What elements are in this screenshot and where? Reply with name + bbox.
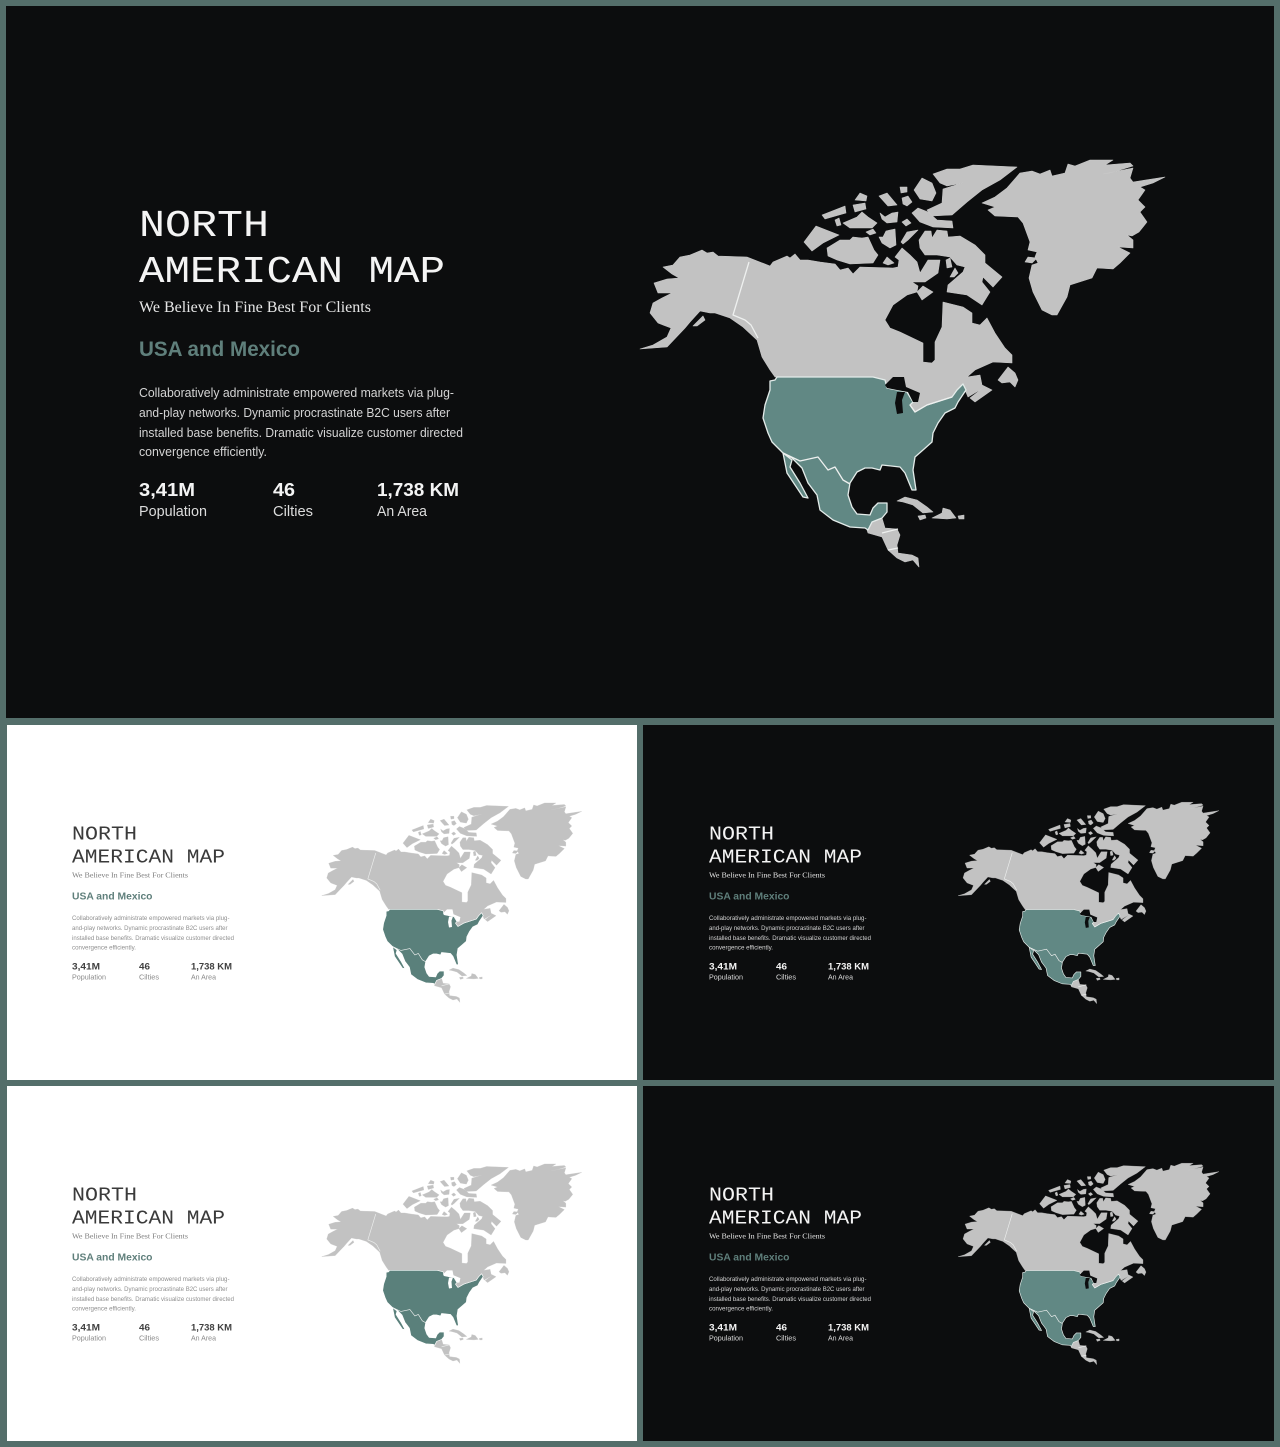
body text: installed base benefits. Dramatic visualize customer directed xyxy=(72,1296,234,1303)
heading: USA and Mexico: USA and Mexico xyxy=(72,890,152,902)
map: North America xyxy=(958,802,1219,1004)
body text: Collaboratively administrate empowered markets via plug- xyxy=(709,1276,866,1283)
panel: small light slide, top left xyxy=(7,725,637,1080)
stat: cities: Cilties xyxy=(139,1334,159,1342)
body text: and-play networks. Dynamic procrastinate B2C users after xyxy=(72,1286,228,1293)
body text: convergence efficiently. xyxy=(139,445,267,459)
body text: Collaboratively administrate empowered markets via plug- xyxy=(72,1276,230,1283)
stat: area: 1,738 KM xyxy=(828,962,869,972)
stat: population: 3,41M xyxy=(709,1322,737,1332)
heading: USA and Mexico: USA and Mexico xyxy=(72,1252,152,1264)
stat: area: An Area xyxy=(828,972,854,982)
slide content xyxy=(709,802,1219,1004)
stat: population: Population xyxy=(72,1334,106,1342)
stat: cities: 46 xyxy=(139,962,150,972)
main slide background xyxy=(6,6,1274,718)
subtitle: We Believe In Fine Best For Clients xyxy=(72,1232,188,1240)
stat: cities: Cilties xyxy=(273,503,313,520)
stat: area: An Area xyxy=(191,972,217,982)
title: NORTH xyxy=(709,1184,774,1206)
stat: area xyxy=(191,1322,232,1342)
title: NORTH xyxy=(72,824,137,846)
slide content xyxy=(709,1163,1219,1365)
body text: Collaboratively administrate empowered markets via plug- xyxy=(72,915,230,922)
title: AMERICAN MAP xyxy=(139,251,445,294)
stat: area: An Area xyxy=(377,503,428,520)
body text: convergence efficiently. xyxy=(72,1306,136,1312)
stat: area xyxy=(191,962,232,982)
heading: USA and Mexico: USA and Mexico xyxy=(709,890,790,902)
stat: area: 1,738 KM xyxy=(191,962,232,972)
body text: convergence efficiently. xyxy=(709,1306,773,1312)
stat: population: 3,41M xyxy=(72,962,100,972)
title: AMERICAN MAP xyxy=(72,1208,225,1230)
panel: small light slide, bottom left xyxy=(7,1086,637,1441)
stat: cities: Cilties xyxy=(776,1334,796,1342)
stat: area xyxy=(828,962,869,982)
stat: cities xyxy=(273,479,313,520)
body text: convergence efficiently. xyxy=(72,944,136,952)
body text: installed base benefits. Dramatic visualize customer directed xyxy=(72,935,234,942)
body text: and-play networks. Dynamic procrastinate B2C users after xyxy=(709,1286,864,1293)
stat: population: Population xyxy=(139,503,207,520)
stat: population xyxy=(139,479,207,520)
stat: population: Population xyxy=(72,972,106,982)
stat: area: 1,738 KM xyxy=(377,479,459,500)
title: NORTH xyxy=(709,824,774,846)
stat: population xyxy=(72,962,106,982)
subtitle: We Believe In Fine Best For Clients xyxy=(709,870,825,880)
map: North America xyxy=(958,1163,1219,1365)
slide background xyxy=(7,725,637,1080)
stat: population: 3,41M xyxy=(72,1322,100,1332)
stat: cities xyxy=(139,1322,159,1342)
panel: small dark slide, bottom right xyxy=(643,1086,1274,1441)
map: North America xyxy=(322,1164,582,1363)
stat: area: An Area xyxy=(191,1334,217,1342)
stat: cities: Cilties xyxy=(139,972,159,982)
stat: cities: 46 xyxy=(273,479,295,500)
stat: cities: Cilties xyxy=(776,972,796,982)
stat: cities: 46 xyxy=(139,1322,150,1332)
stat: area: 1,738 KM xyxy=(191,1322,232,1332)
slide background xyxy=(643,1086,1274,1441)
stat: population: Population xyxy=(709,1334,743,1342)
stat: population xyxy=(72,1322,106,1342)
slide content xyxy=(72,1164,582,1363)
body text: and-play networks. Dynamic procrastinate B2C users after xyxy=(72,925,228,932)
title: NORTH xyxy=(139,205,269,248)
stat: cities: 46 xyxy=(776,962,787,972)
stat: population xyxy=(709,962,743,982)
body text: Collaboratively administrate empowered markets via plug- xyxy=(709,915,866,922)
stat: area xyxy=(828,1322,869,1342)
subtitle: We Believe In Fine Best For Clients xyxy=(139,299,371,316)
stat: population xyxy=(709,1322,743,1342)
body text: Collaboratively administrate empowered markets via plug- xyxy=(139,386,454,400)
stat: area xyxy=(377,479,459,520)
subtitle: We Believe In Fine Best For Clients xyxy=(709,1232,825,1240)
title: NORTH xyxy=(72,1184,137,1206)
stat: cities: 46 xyxy=(776,1322,787,1332)
stat: area: 1,738 KM xyxy=(828,1322,869,1332)
map: North America xyxy=(640,160,1165,567)
body text: installed base benefits. Dramatic visualize customer directed xyxy=(139,426,463,440)
title: AMERICAN MAP xyxy=(72,846,225,868)
stat: area: An Area xyxy=(828,1334,854,1342)
map: North America xyxy=(322,803,582,1002)
heading: USA and Mexico: USA and Mexico xyxy=(139,338,300,361)
body text: and-play networks. Dynamic procrastinate B2C users after xyxy=(139,406,450,420)
body text: installed base benefits. Dramatic visualize customer directed xyxy=(709,1296,871,1303)
stat: cities xyxy=(776,962,796,982)
slide background xyxy=(7,1086,637,1441)
subtitle: We Believe In Fine Best For Clients xyxy=(72,870,188,880)
panel: small dark slide, top right xyxy=(643,725,1274,1080)
stat: cities xyxy=(776,1322,796,1342)
slide background xyxy=(643,725,1274,1080)
title: AMERICAN MAP xyxy=(709,1208,862,1230)
stat: population: 3,41M xyxy=(709,962,737,972)
body text: and-play networks. Dynamic procrastinate B2C users after xyxy=(709,925,864,932)
stat: population: Population xyxy=(709,972,743,982)
body text: convergence efficiently. xyxy=(709,944,773,952)
stat: population: 3,41M xyxy=(139,479,195,500)
panel: main dark slide xyxy=(6,6,1274,718)
stat: cities xyxy=(139,962,159,982)
heading: USA and Mexico: USA and Mexico xyxy=(709,1252,790,1264)
title: AMERICAN MAP xyxy=(709,846,862,868)
body text: installed base benefits. Dramatic visualize customer directed xyxy=(709,935,871,942)
slide content xyxy=(72,803,582,1002)
